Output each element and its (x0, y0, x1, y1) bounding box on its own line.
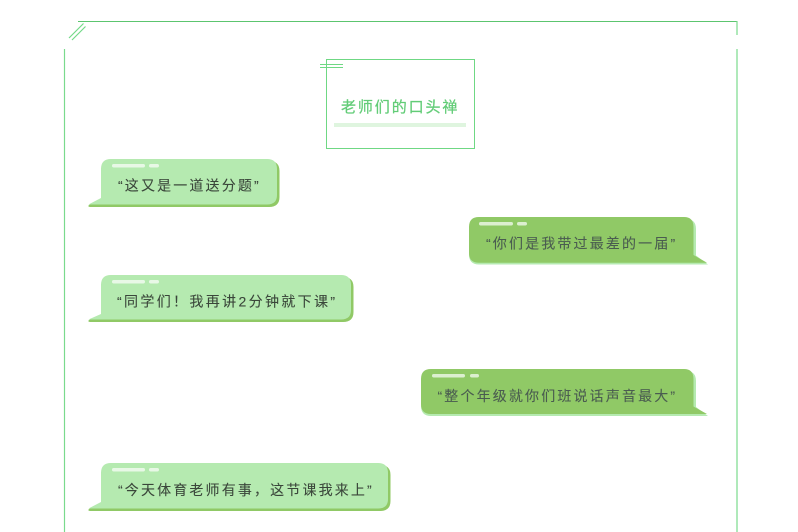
speech bubble 5: “今天体育老师有事，这节课我来上” (118, 482, 374, 498)
speech bubble 2: “你们是我带过最差的一届” (486, 236, 677, 252)
title box (320, 60, 474, 148)
speech bubble 3: “同学们！我再讲2分钟就下课” (117, 294, 337, 310)
speech bubble 2 (469, 217, 708, 264)
speech bubble 1: “这又是一道送分题” (118, 178, 261, 194)
icon: corner diagonal lines (69, 24, 86, 40)
speech bubble 4 (421, 369, 708, 416)
title: 老师们的口头禅 (341, 99, 459, 116)
speech bubble 4: “整个年级就你们班说话声音最大” (438, 388, 677, 404)
speech bubble 1 (88, 159, 279, 207)
speech bubble 3 (88, 275, 353, 322)
speech bubble 5 (88, 463, 390, 511)
